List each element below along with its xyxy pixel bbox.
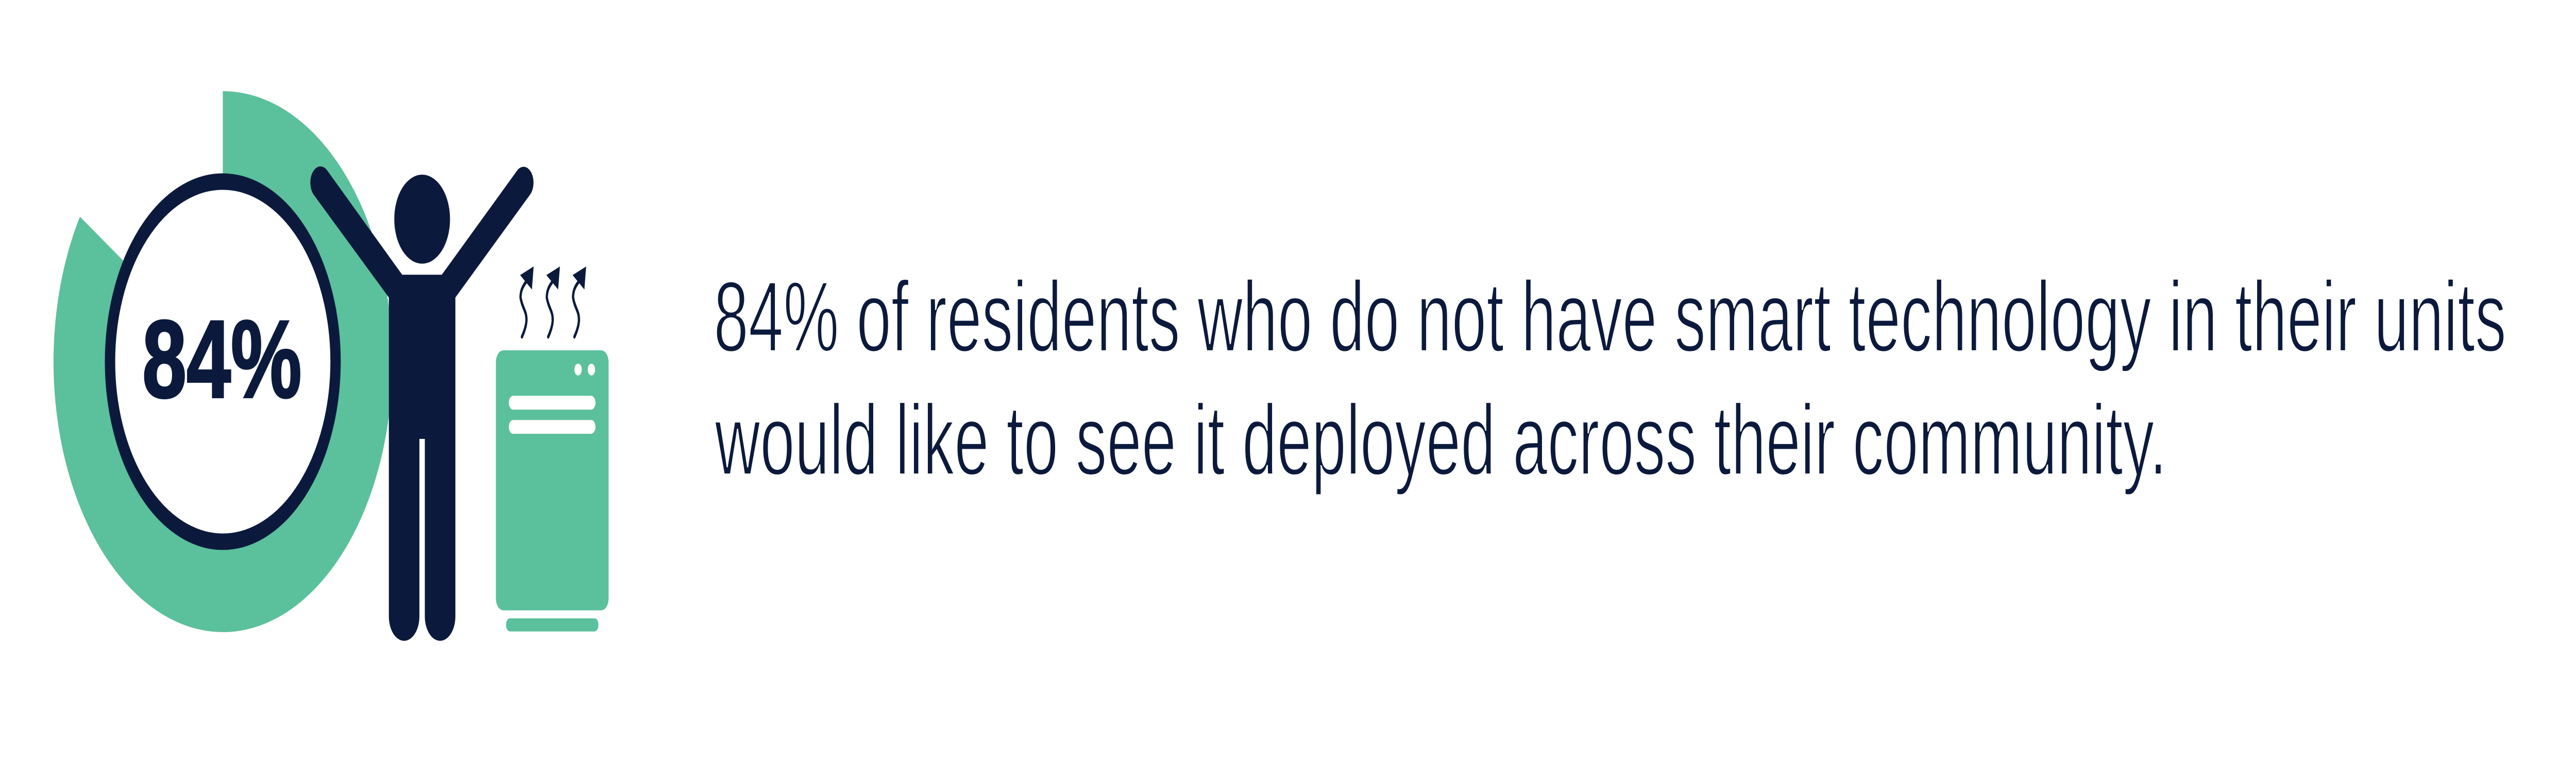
center circle [110, 181, 335, 542]
icon: person with raised arms [310, 166, 534, 641]
indicator light left [574, 364, 582, 376]
icon: air flow arrows [520, 266, 586, 337]
person body [310, 166, 534, 641]
arrow 2 [546, 266, 560, 337]
vent bar top [509, 396, 596, 410]
icon: air purifier [496, 350, 608, 632]
value label: 84% [142, 297, 302, 421]
donut chart: 84 percent [54, 91, 392, 632]
purifier body [496, 350, 608, 610]
text line 1: 84% of residents who do not have smart technology in their units [714, 261, 2506, 373]
arrow 1 [520, 266, 534, 337]
donut segment [54, 91, 392, 632]
person head [394, 175, 450, 264]
purifier base [506, 618, 599, 632]
vent bar bottom [509, 420, 596, 434]
indicator light right [588, 364, 595, 376]
arrow 3 [572, 266, 586, 337]
text line 2: would like to see it deployed across their community. [715, 384, 2167, 496]
text block: statistic statement [714, 261, 2506, 496]
